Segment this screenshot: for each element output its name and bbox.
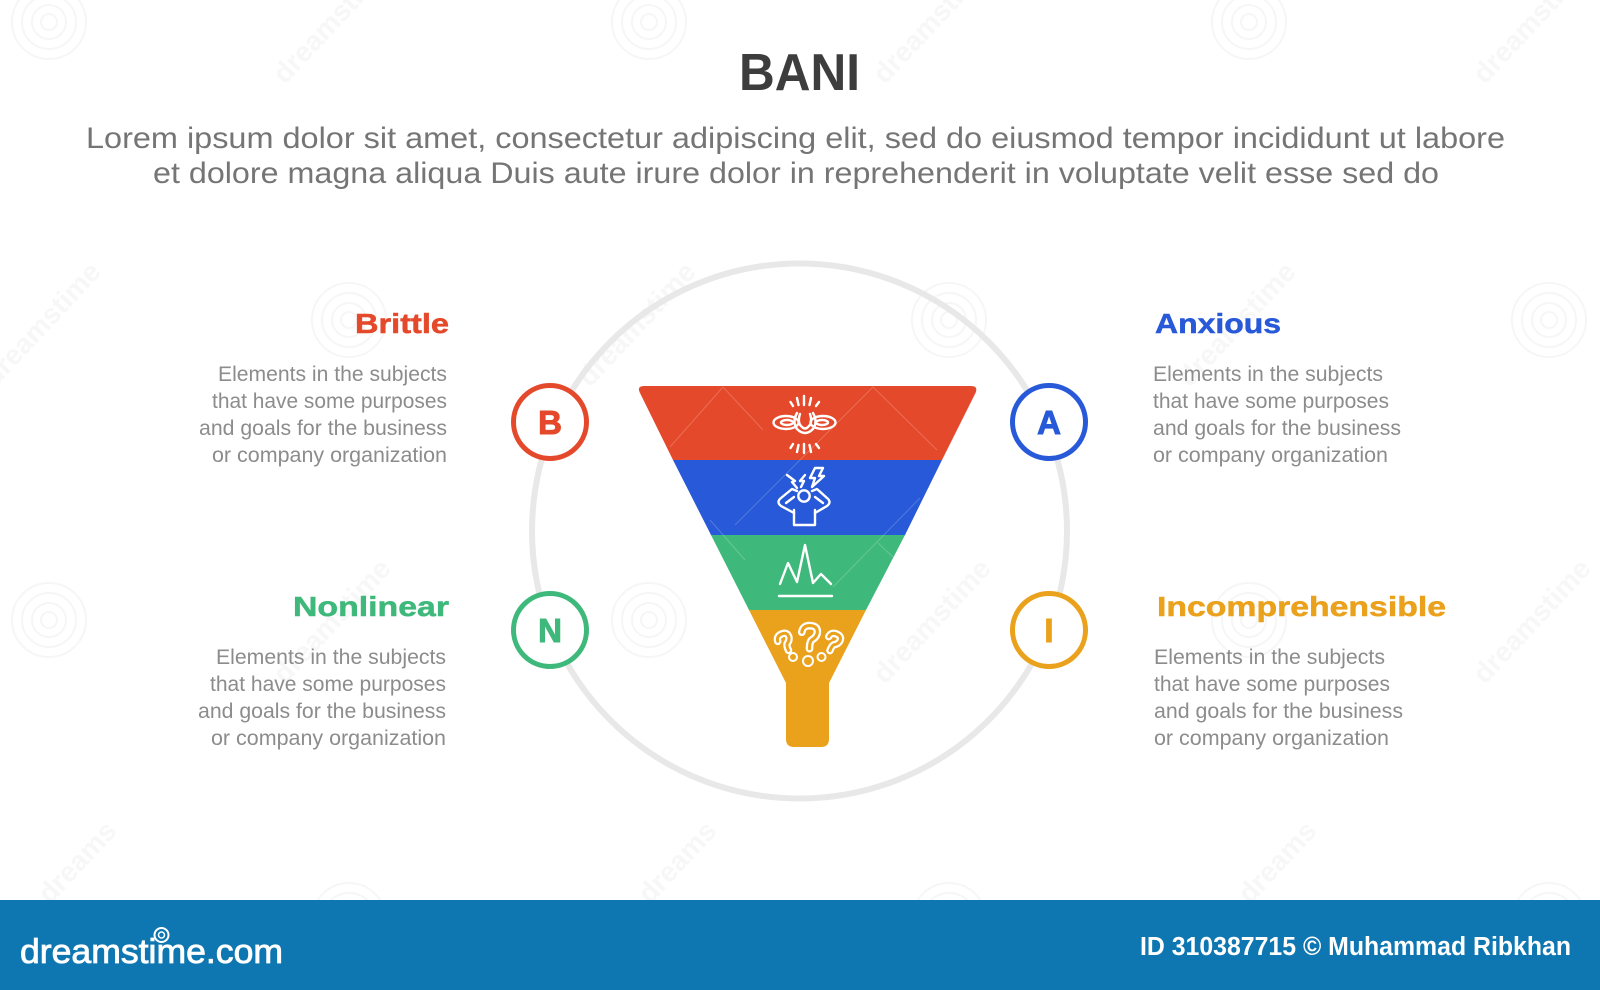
text block: nonlinear: Elements in the subjects — [216, 645, 446, 669]
badge: B — [514, 386, 586, 458]
watermark pattern: dreams — [32, 815, 122, 909]
badge: N — [514, 594, 586, 666]
badge: A: A — [1037, 404, 1061, 441]
watermark pattern: dreams — [632, 815, 722, 909]
watermark pattern: dreamstime — [267, 553, 397, 689]
footer credit: ID 310387715 © Muhammad Ribkhan — [1140, 933, 1571, 961]
subtitle text: et dolore magna aliqua Duis aute irure dolor in reprehenderit in voluptate velit esse sed do — [153, 157, 1439, 190]
footer logo: dreamstime.com — [20, 933, 283, 971]
icon: nonlinear chart — [779, 545, 832, 596]
funnel band: anxious — [673, 460, 942, 535]
watermark lines on funnel — [670, 387, 937, 587]
text block: anxious: and goals for the business — [1153, 416, 1401, 440]
heading: anxious: Anxious — [1155, 308, 1281, 339]
text block: nonlinear: and goals for the business — [198, 699, 446, 723]
text block: brittle: Elements in the subjects — [218, 362, 447, 386]
text block: nonlinear — [198, 645, 446, 750]
funnel — [639, 386, 976, 747]
funnel band: nonlinear — [711, 535, 905, 610]
watermark pattern: dreamstime — [572, 256, 702, 392]
badge: N: N — [538, 612, 562, 649]
title: BANI — [739, 44, 860, 102]
badge: B: B — [538, 404, 562, 441]
panel: incomprehensible — [1154, 591, 1446, 750]
watermark pattern: dreams — [1232, 815, 1322, 909]
heading: nonlinear: Nonlinear — [293, 591, 449, 622]
funnel band: brittle — [639, 386, 976, 460]
heading: incomprehensible: Incomprehensible — [1157, 591, 1446, 622]
watermark pattern: dreamstime — [1172, 256, 1302, 392]
text block: anxious: or company organization — [1153, 443, 1388, 467]
heading: brittle: Brittle — [355, 308, 449, 339]
text block: brittle: or company organization — [212, 443, 447, 467]
text block: brittle — [199, 362, 447, 467]
text block: nonlinear: that have some purposes — [210, 672, 446, 696]
badge: I: I — [1044, 612, 1054, 649]
text block: incomprehensible: or company organization — [1154, 726, 1389, 750]
funnel band: incomprehensible with spout — [749, 610, 866, 747]
icon: question marks — [776, 626, 842, 666]
subtitle text — [86, 122, 1505, 190]
text block: incomprehensible: and goals for the business — [1154, 699, 1403, 723]
panel: anxious — [1153, 308, 1401, 467]
text block: incomprehensible: that have some purposes — [1154, 672, 1390, 696]
subtitle text: Lorem ipsum dolor sit amet, consectetur adipiscing elit, sed do eiusmod tempor incididunt ut labore — [86, 122, 1505, 155]
text block: incomprehensible: Elements in the subjects — [1154, 645, 1385, 669]
panel: brittle — [199, 308, 449, 467]
text block: nonlinear: or company organization — [211, 726, 446, 750]
icon: broken chain — [774, 396, 836, 453]
watermark pattern: dreamstime — [1467, 553, 1597, 689]
panel: nonlinear — [198, 591, 449, 750]
outer ring — [532, 264, 1067, 798]
icon: stressed person — [778, 468, 830, 525]
text block: brittle: and goals for the business — [199, 416, 447, 440]
footer bar — [0, 900, 1600, 990]
text block: brittle: that have some purposes — [212, 389, 447, 413]
badge: A — [1012, 386, 1086, 458]
badge: I — [1012, 594, 1086, 666]
watermark pattern: dreamstime — [867, 553, 997, 689]
text block: anxious: Elements in the subjects — [1153, 362, 1383, 386]
text block: anxious — [1153, 362, 1401, 467]
text block: incomprehensible — [1154, 645, 1403, 750]
text block: anxious: that have some purposes — [1153, 389, 1389, 413]
